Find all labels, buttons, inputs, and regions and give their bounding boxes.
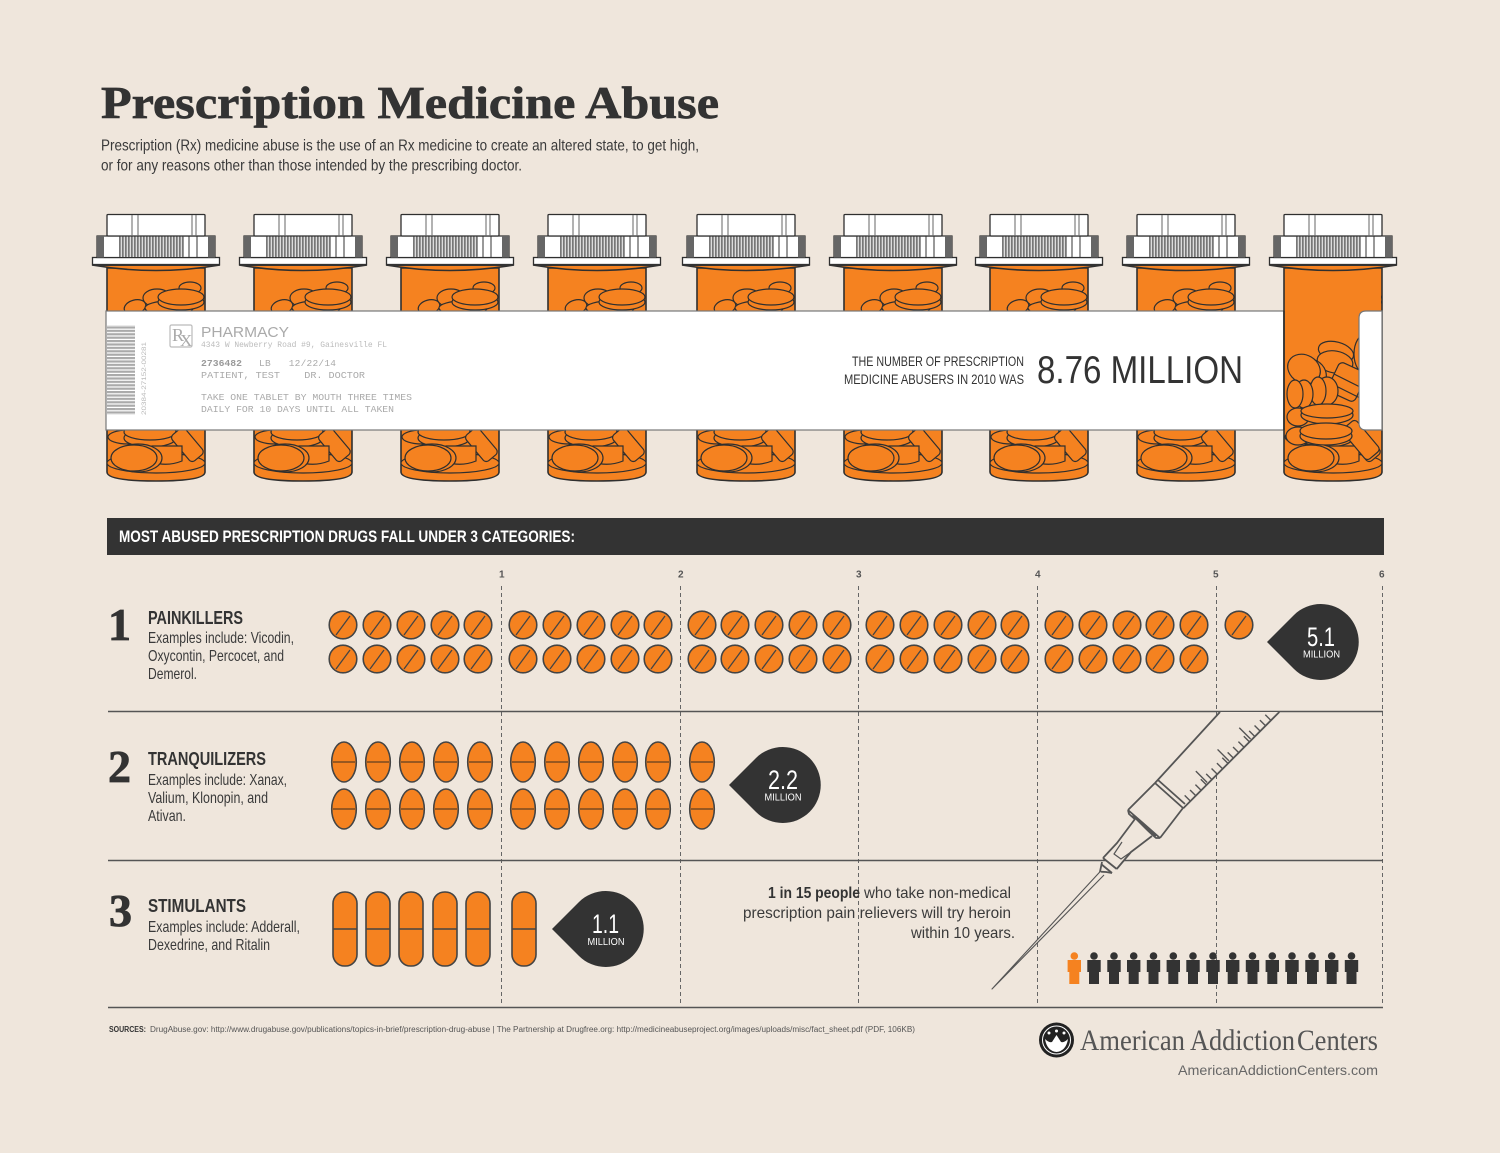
pharmacy details: LB 12/22/14 <box>259 358 336 369</box>
painkillers text: Examples include: Vicodin, <box>148 630 294 647</box>
pharmacy details <box>201 341 412 415</box>
logo wordmark: Addiction <box>1190 1024 1295 1057</box>
intro text: Prescription (Rx) medicine abuse is the use of an Rx medicine to create an altered state, to get high, <box>101 138 699 154</box>
pharmacy details: TAKE ONE TABLET BY MOUTH THREE TIMES <box>201 392 412 403</box>
tranquilizers text: TRANQUILIZERS <box>148 749 266 769</box>
infographic canvas <box>92 86 1398 1075</box>
stimulants text: Dexedrine, and Ritalin <box>148 937 270 954</box>
axis ticks: 3 <box>856 570 862 580</box>
barcode number: 20384-27152-00281 <box>142 341 148 415</box>
title: Prescription Medicine Abuse <box>101 77 719 128</box>
last bottle with pills visible <box>1269 214 1397 481</box>
Rx logo: R <box>172 325 184 345</box>
stimulant capsules <box>333 892 536 966</box>
axis ticks: 5 <box>1213 570 1219 580</box>
Rx logo <box>170 325 192 350</box>
tranquilizers text: Ativan. <box>148 808 186 825</box>
callout: 1.1 million: 1.1 <box>592 909 619 939</box>
stimulants text: STIMULANTS <box>148 896 246 916</box>
painkillers text: Oxycontin, Percocet, and <box>148 648 284 665</box>
bottle label tab <box>1359 311 1382 430</box>
heroin stat text <box>743 885 1015 942</box>
heroin stat text: prescription pain relievers will try heroin <box>743 905 1011 922</box>
callout: 5.1 million <box>1267 604 1359 680</box>
website: AmericanAddictionCenters.com <box>1178 1062 1378 1078</box>
axis ticks: 6 <box>1379 570 1385 580</box>
heroin stat text: 1 in 15 people <box>768 885 860 902</box>
callout: 2.2 million <box>729 747 821 823</box>
painkillers text: Demerol. <box>148 666 197 683</box>
section heading bar <box>107 518 1384 555</box>
intro text <box>101 138 699 174</box>
American Addiction Centers logo <box>1039 1022 1378 1078</box>
sources: SOURCES: <box>109 1025 146 1034</box>
1 in 15 people pictogram <box>1068 952 1358 984</box>
pharmacy details: DAILY FOR 10 DAYS UNTIL ALL TAKEN <box>201 404 394 415</box>
logo wordmark: Centers <box>1297 1024 1378 1057</box>
pharmacy details: 4343 W Newberry Road #9, Gainesville FL <box>201 341 387 350</box>
tranquilizer pills <box>330 741 716 830</box>
Rx logo: X <box>180 331 192 350</box>
heroin stat text: who take non-medical <box>863 885 1011 902</box>
axis ticks: 4 <box>1035 570 1041 580</box>
syringe illustration <box>992 712 1279 989</box>
callout: 2.2 million: 2.2 <box>768 765 798 795</box>
callout: 1.1 million <box>552 891 644 967</box>
row 3: stimulants <box>109 885 644 967</box>
logo wordmark: American <box>1080 1024 1185 1057</box>
logo wordmark <box>1080 1024 1378 1057</box>
painkillers text <box>148 608 294 683</box>
pharmacy details: PATIENT, TEST DR. DOCTOR <box>201 370 365 381</box>
painkiller pills <box>328 610 1254 674</box>
row 1: painkillers <box>108 599 1359 683</box>
tranquilizers text: Examples include: Xanax, <box>148 772 287 789</box>
prescription label <box>106 311 1284 430</box>
heroin stat text: within 10 years. <box>910 925 1015 942</box>
painkillers text: PAINKILLERS <box>148 608 243 628</box>
callout: 2.2 million: MILLION <box>764 792 802 804</box>
row 2: tranquilizers <box>108 741 821 830</box>
stat: 8.76 million: 8.76 MILLION <box>1037 349 1243 392</box>
number 2: 2 <box>108 741 131 792</box>
tranquilizers text: Valium, Klonopin, and <box>148 790 268 807</box>
sources: DrugAbuse.gov: http://www.drugabuse.gov/publications/topics-in-brief/prescription-drug-abuse | The Partnership at Drugfree.org: http://medicineabuseproject.org/images/uploads/misc/fact_sheet.pdf (PDF, 106KB) <box>150 1025 915 1034</box>
callout: 5.1 million: MILLION <box>1303 650 1340 660</box>
number 3: 3 <box>109 885 132 936</box>
abusers caption <box>844 354 1024 387</box>
abusers caption: MEDICINE ABUSERS IN 2010 WAS <box>844 372 1024 387</box>
intro text: or for any reasons other than those intended by the prescribing doctor. <box>101 158 522 174</box>
section heading bar: MOST ABUSED PRESCRIPTION DRUGS FALL UNDER 3 CATEGORIES: <box>119 527 575 546</box>
barcode <box>107 325 135 415</box>
number 1: 1 <box>108 599 131 650</box>
axis ticks <box>499 570 1385 580</box>
pharmacy name: PHARMACY <box>201 324 289 341</box>
stimulants text <box>148 896 300 954</box>
axis ticks: 1 <box>499 570 505 580</box>
pharmacy details: 2736482 <box>201 358 242 369</box>
callout: 1.1 million: MILLION <box>588 937 624 948</box>
callout: 5.1 million: 5.1 <box>1307 622 1335 652</box>
logo emblem <box>1039 1022 1074 1058</box>
tranquilizers text <box>148 749 287 825</box>
abusers caption: THE NUMBER OF PRESCRIPTION <box>852 354 1024 369</box>
stimulants text: Examples include: Adderall, <box>148 919 300 936</box>
pill bottles row <box>92 214 1250 481</box>
axis ticks: 2 <box>678 570 684 580</box>
